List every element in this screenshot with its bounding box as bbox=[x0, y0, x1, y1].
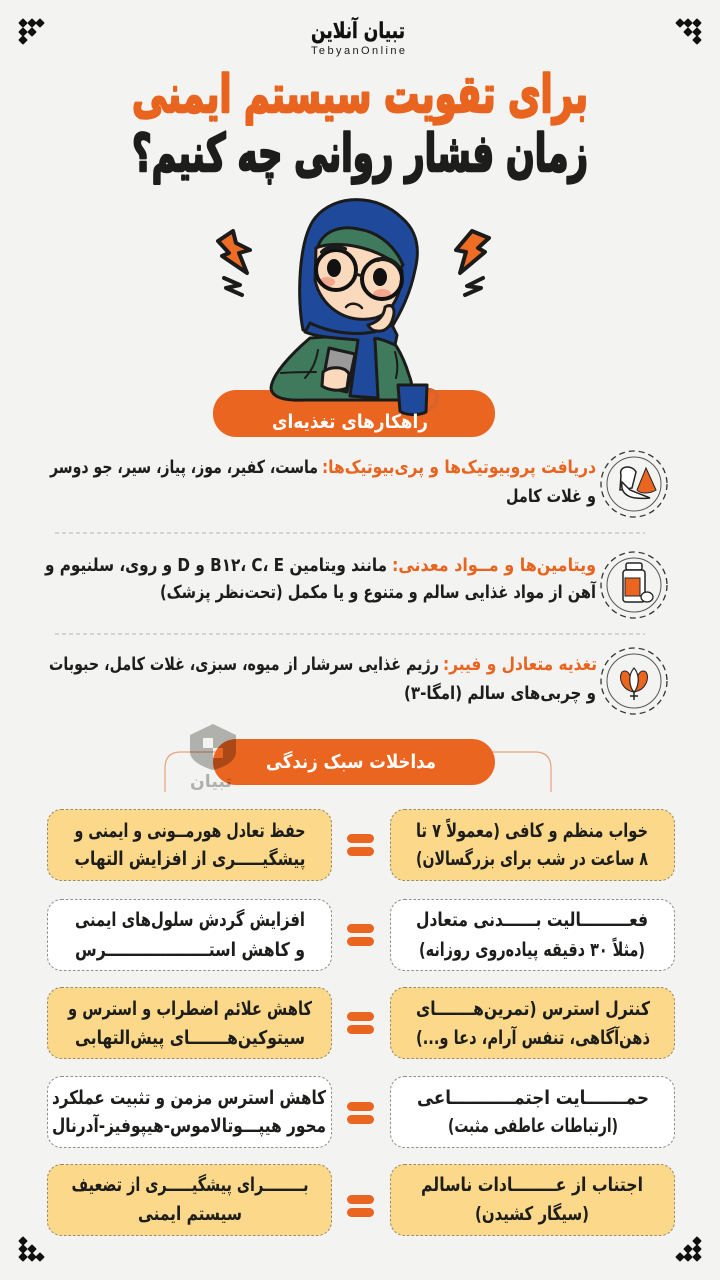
card: action 1: ۸ ساعت در شب برای بزرگسالان) bbox=[416, 847, 648, 870]
face bbox=[315, 244, 402, 319]
card: effect 4: کاهش استرس مزمن و تثبیت عملکرد bbox=[52, 1087, 327, 1109]
card: effect 1 bbox=[48, 810, 332, 880]
icon: equals bbox=[347, 1012, 374, 1034]
nutrition item 2: ویتامین‌ها و مــواد معدنی: bbox=[392, 555, 596, 576]
card: effect 3 bbox=[48, 988, 332, 1058]
heading pill: lifestyle bbox=[213, 739, 495, 785]
corner ornament: bottom left bbox=[18, 1236, 45, 1262]
nutrition item 3: رژیم غذایی سرشار از میوه، سبزی، غلات کامل، حبوبات bbox=[49, 654, 439, 675]
row 1 bbox=[48, 810, 674, 880]
card: effect 1: پیشگیـــــری از افزایش التهاب bbox=[74, 847, 306, 870]
icon: equals bbox=[347, 1195, 374, 1217]
inner cap bbox=[318, 228, 403, 275]
row 3 bbox=[48, 988, 674, 1058]
illustration: stressed woman bbox=[218, 200, 489, 400]
body bbox=[271, 333, 412, 400]
card: action 4 bbox=[390, 1076, 674, 1148]
logo: تبیان آنلاین bbox=[311, 16, 405, 44]
card: effect 3: کاهش علائم اضطراب و استرس و bbox=[67, 998, 313, 1020]
nutrition item 3: و چربی‌های سالم (امگا-۳) bbox=[404, 682, 596, 704]
card: effect 5: سیستم ایمنی bbox=[138, 1203, 242, 1225]
logo bbox=[311, 16, 405, 57]
icon: right lightning bbox=[456, 231, 489, 295]
hand with phone bbox=[322, 368, 349, 390]
icon: equals bbox=[347, 1102, 374, 1124]
nutrition item 2: مانند ویتامین B۱۲، C، E و D و روی، سلنیوم و bbox=[44, 555, 387, 576]
watermark bbox=[190, 724, 236, 792]
nutrition item 2: آهن از مواد غذایی سالم و متنوع و یا مکمل (تحت‌نظر پزشک) bbox=[160, 580, 597, 603]
card: action 3 bbox=[390, 988, 674, 1058]
card: action 1 bbox=[390, 810, 674, 880]
hijab bbox=[300, 200, 417, 337]
nutrition item 3 bbox=[49, 654, 597, 704]
hand on cheek bbox=[368, 306, 394, 331]
heading pill: nutrition background bbox=[213, 390, 495, 437]
nutrition item 1: و غلات کامل bbox=[506, 486, 596, 507]
icon: mug bbox=[398, 385, 437, 415]
card: action 3: ذهن‌آگاهی، تنفس آرام، دعا و...) bbox=[416, 1025, 650, 1049]
card: action 2 bbox=[390, 900, 674, 970]
nutrition item 1: ماست، کفیر، موز، پیاز، سیر، جو دوسر bbox=[49, 457, 318, 478]
title bbox=[132, 65, 588, 184]
card: action 3: کنترل استرس (تمرین‌هـــــــای bbox=[416, 998, 651, 1020]
bracket connector bbox=[165, 752, 551, 792]
phone bbox=[322, 348, 355, 392]
nutrition item 3: تغذیه متعادل و فیبر: bbox=[443, 654, 597, 675]
card: effect 2: افزایش گردش سلول‌های ایمنی bbox=[75, 908, 305, 931]
row 4 bbox=[48, 1076, 674, 1148]
card: action 2: (مثلاً ۳۰ دقیقه پیاده‌روی روزانه) bbox=[419, 937, 645, 961]
icon: leafy vegetables bbox=[601, 648, 667, 714]
nutrition item 1: دریافت پروبیوتیک‌ها و پری‌بیوتیک‌ها: bbox=[322, 457, 596, 478]
corner ornament: top left bbox=[18, 18, 45, 45]
heading text: nutrition: راهکارهای تغذیه‌ای bbox=[272, 411, 428, 433]
card: action 4: (ارتباطات عاطفی مثبت) bbox=[448, 1115, 618, 1137]
card: effect 5: بــــــــرای پیشگیـــــری از تضعیف bbox=[72, 1173, 308, 1196]
watermark: تبیان bbox=[190, 772, 232, 792]
card: effect 5 bbox=[48, 1164, 332, 1236]
card: effect 4: محور هیپـــوتالاموس-هیپوفیز-آدرنال bbox=[52, 1113, 326, 1137]
card: action 5: اجتناب از عــــــــادات ناسالم bbox=[421, 1174, 643, 1196]
logo: TebyanOnline bbox=[311, 45, 405, 57]
row 5 bbox=[48, 1164, 674, 1236]
corner ornament: top right bbox=[675, 18, 702, 45]
card: effect 3: سیتوکین‌هـــــــای پیش‌التهابی bbox=[75, 1027, 305, 1049]
icon: equals bbox=[347, 834, 374, 856]
icon: equals bbox=[347, 924, 374, 946]
card: effect 4 bbox=[48, 1076, 332, 1148]
icon: left lightning bbox=[218, 231, 250, 295]
card: effect 2: و کاهش استـــــــــــــــــــرس bbox=[75, 939, 305, 961]
card: effect 2 bbox=[48, 900, 332, 970]
icon: supplement bottle bbox=[601, 552, 667, 618]
card: action 2: فعـــــــــالیت بــــــدنی متعادل bbox=[416, 909, 648, 931]
row 2 bbox=[48, 900, 674, 970]
card: action 1: خواب منظم و کافی (معمولاً ۷ تا bbox=[416, 818, 648, 842]
card: effect 1: حفظ تعادل هورمــونی و ایمنی و bbox=[74, 820, 305, 842]
glasses bbox=[316, 247, 402, 308]
card: action 4: حمـــــــایت اجتمـــــــــــاعی bbox=[417, 1087, 649, 1109]
card: action 5: (سیگار کشیدن) bbox=[475, 1202, 589, 1225]
nutrition item 2 bbox=[44, 555, 597, 603]
nutrition item 1 bbox=[49, 457, 596, 507]
sleeve lines bbox=[281, 350, 397, 378]
card: action 5 bbox=[390, 1164, 674, 1236]
scarf bbox=[305, 323, 397, 398]
icon: fruits bbox=[601, 451, 667, 517]
corner ornament: bottom right bbox=[675, 1236, 702, 1262]
heading pill: lifestyle: مداخلات سبک زندگی bbox=[266, 750, 436, 773]
